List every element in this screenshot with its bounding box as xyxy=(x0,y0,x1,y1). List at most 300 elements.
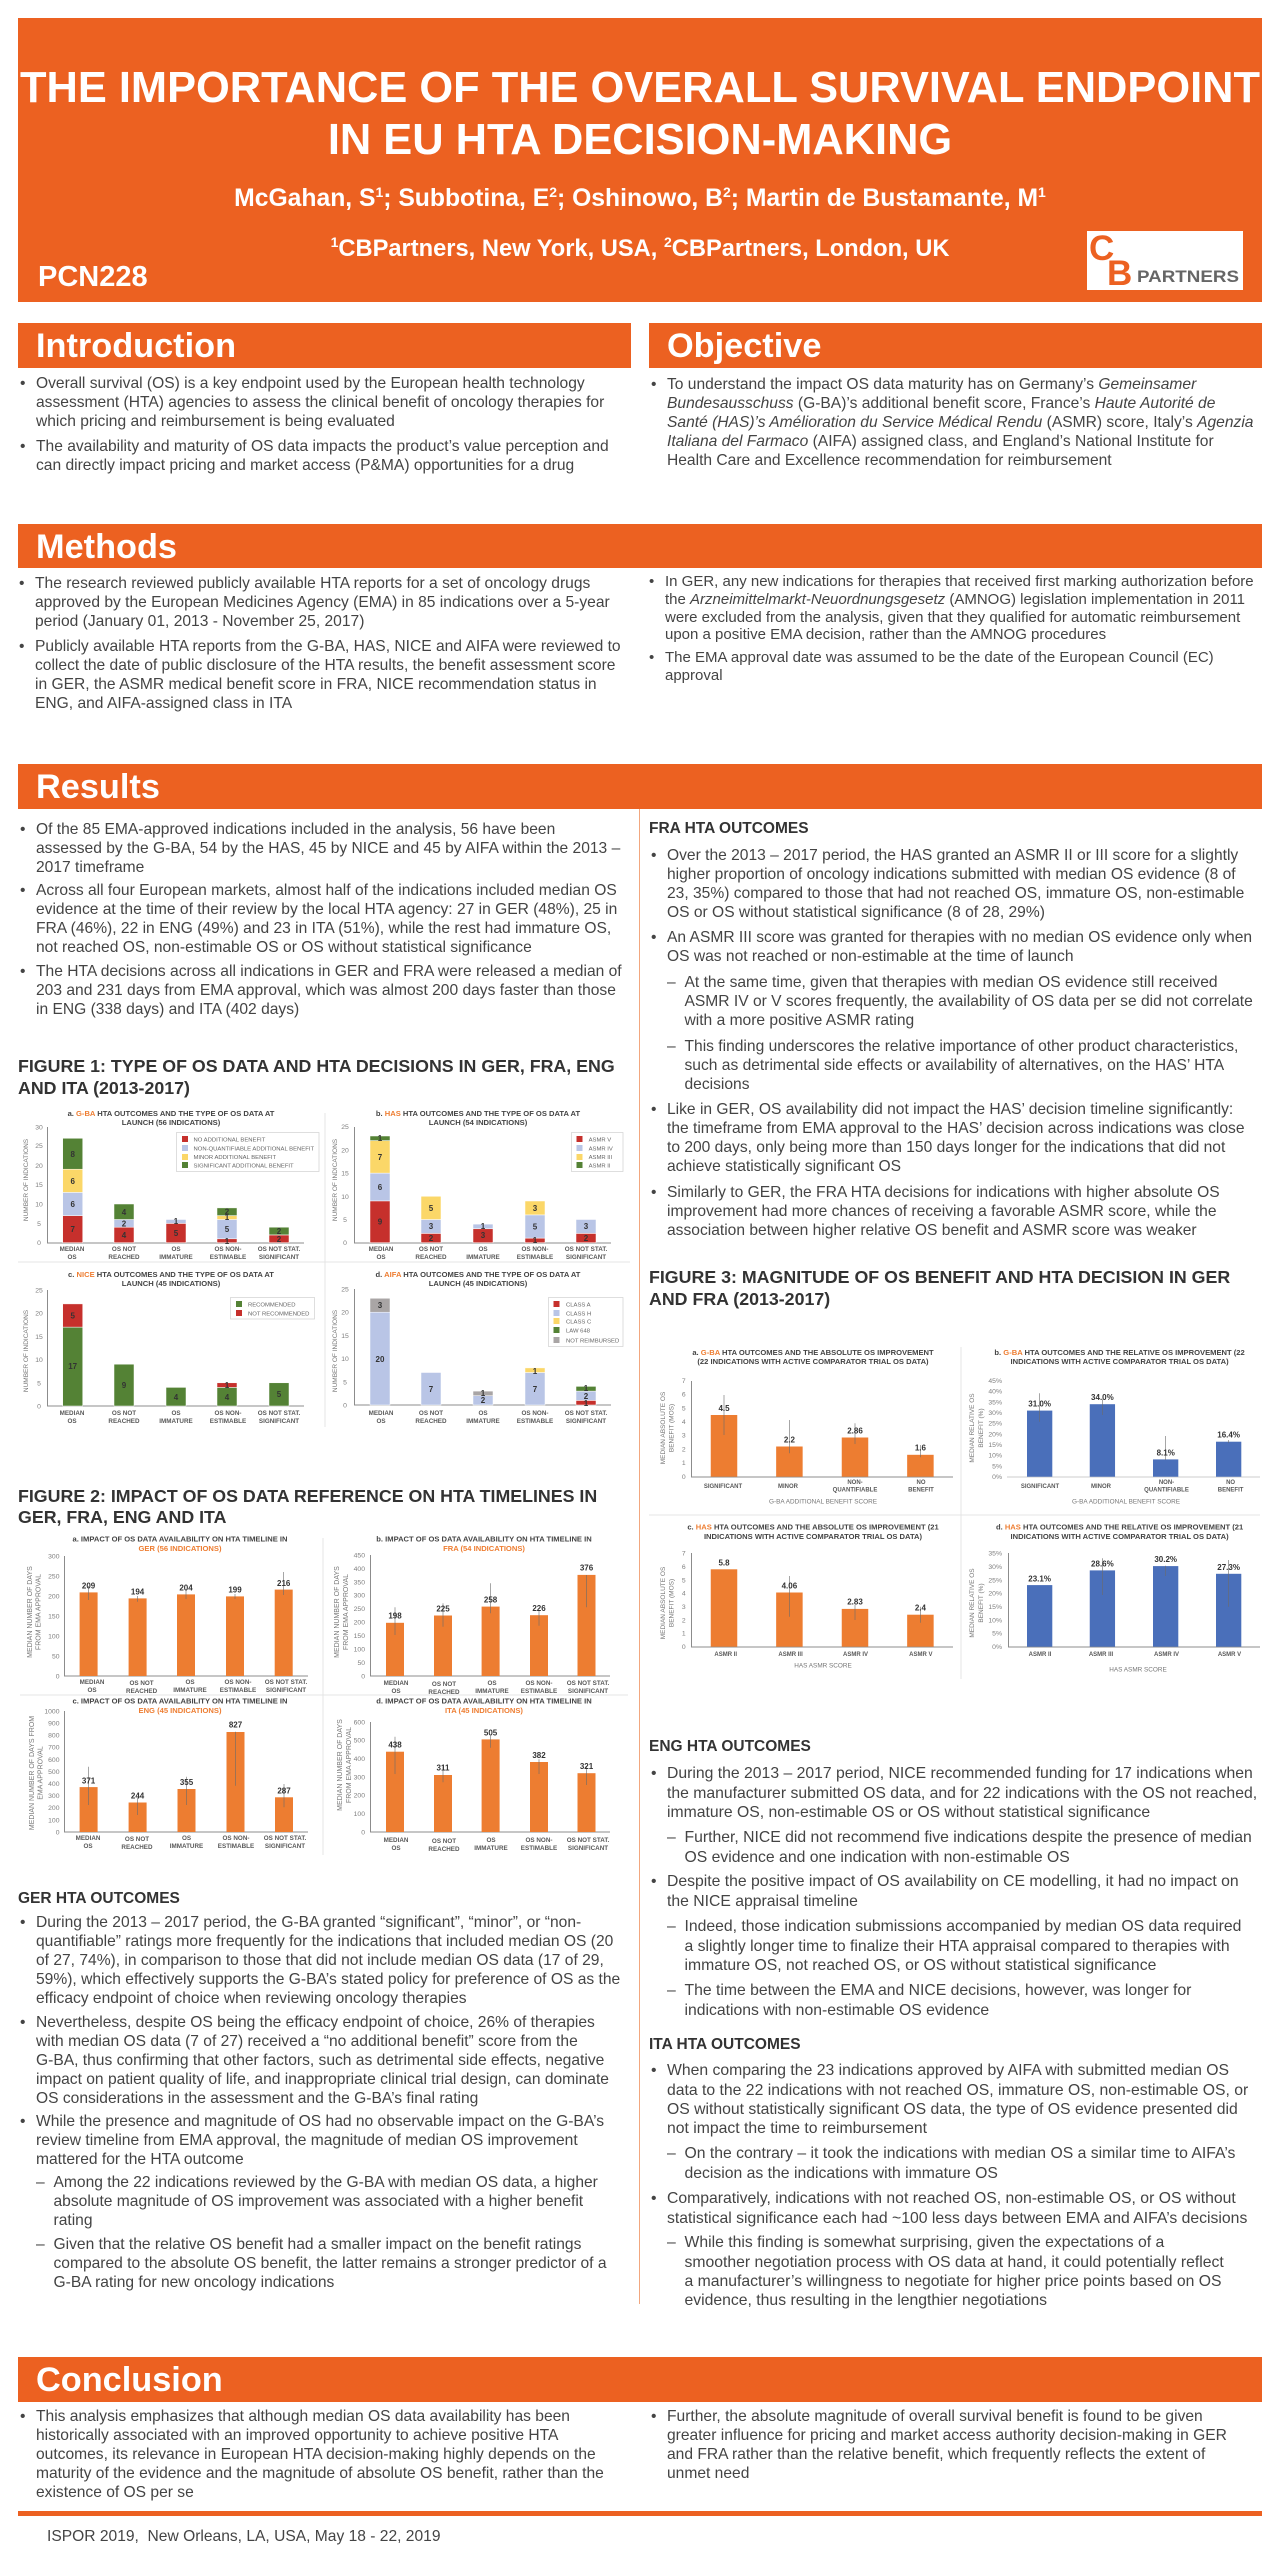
chart: d. ITA timeline bars: OS NOT STAT. xyxy=(567,1837,609,1844)
heading: ENG HTA outcomes: ENG HTA OUTCOMES xyxy=(649,1738,811,1755)
text block: ENG sub-bullet 3 xyxy=(684,1981,1191,2020)
chart: b. FRA timeline bars: b. IMPACT OF OS DATA AVAILABILITY ON HTA TIMELINE IN xyxy=(376,1534,592,1544)
chart: b. HAS stacked bars: OS xyxy=(478,1246,488,1253)
text block: GER bullet 2 xyxy=(36,2012,609,2108)
chart: a. G-BA stacked bars: 1 xyxy=(174,1217,179,1226)
chart: a. GER timeline bars: a. IMPACT OF OS DATA AVAILABILITY ON HTA TIMELINE IN xyxy=(72,1534,288,1544)
chart: c. NICE stacked bars: 4 xyxy=(174,1393,179,1402)
chart: d. HAS relative OS improvement: 5% xyxy=(992,1631,1002,1638)
chart: c. ENG timeline bars: MEDIAN xyxy=(76,1835,101,1842)
footer: conference note: ISPOR 2019, New Orleans, LA, USA, May 18 - 22, 2019 xyxy=(47,2528,440,2545)
text block: methods bullet 4 xyxy=(665,649,1214,685)
chart: b. HAS stacked bars: 5 xyxy=(533,1222,538,1232)
chart: a. GER timeline bars: OS xyxy=(185,1679,195,1686)
text block: FRA bullet 3: Like in GER, OS availability did not impact the HAS’ decision timeline significantly: xyxy=(667,1100,1233,1118)
chart: d. HAS relative OS improvement xyxy=(969,1522,1260,1673)
chart: b. HAS stacked bars: OS NON- xyxy=(522,1246,548,1253)
chart: b. G-BA relative OS improvement: 8.1% xyxy=(1157,1448,1175,1457)
text block: introduction bullet 1: assessment (HTA) agencies to assess the clinical benefit of oncology therapies for xyxy=(36,394,604,410)
chart: d. ITA timeline bars: FROM EMA APPROVAL xyxy=(346,1727,353,1803)
chart: a. GER timeline bars: OS NON- xyxy=(225,1679,251,1686)
chart: a. G-BA stacked bars: 4 xyxy=(122,1208,127,1217)
text block: results bullet 3: in ENG (338 days) and ITA (402 days) xyxy=(36,1000,299,1018)
chart: c. HAS absolute OS improvement: 5.8 xyxy=(718,1558,730,1567)
chart: a. G-BA absolute OS improvement: 2.2 xyxy=(784,1435,796,1444)
chart: d. HAS relative OS improvement: ASMR III xyxy=(1089,1652,1113,1658)
text block: introduction bullet 2: The availability and maturity of OS data impacts the product’s value perception and xyxy=(36,438,609,454)
text block: ITA sub-bullet 1: decision as the indications with immature OS xyxy=(684,2165,998,2182)
chart: a. G-BA stacked bars: 2 xyxy=(277,1227,282,1236)
poster code: PCN228 xyxy=(38,261,148,293)
chart: a. G-BA stacked bars: 5 xyxy=(225,1225,230,1234)
chart: d. ITA timeline bars: MEDIAN NUMBER OF DAYS xyxy=(337,1719,344,1811)
chart: b. HAS stacked bars: 0 xyxy=(343,1240,347,1247)
legend: G-BA: MINOR ADDITIONAL BENEFIT xyxy=(194,1155,276,1161)
chart: c. NICE stacked bars: NUMBER OF INDICATIONS xyxy=(23,1309,30,1392)
text block: GER bullet 1 xyxy=(36,1912,620,2008)
chart: b. FRA timeline bars: OS xyxy=(391,1688,401,1695)
chart: d. HAS relative OS improvement: 30.2% xyxy=(1154,1555,1177,1564)
text block: GER bullet 1: During the 2013 – 2017 period, the G-BA granted “significant”, “minor”, or “non- xyxy=(36,1914,581,1930)
chart: d. HAS relative OS improvement: MEDIAN RELATIVE OS xyxy=(969,1568,976,1638)
chart: c. ENG timeline bars: 0 xyxy=(56,1829,60,1836)
chart: a. G-BA stacked bars: 2 xyxy=(122,1220,127,1228)
icon: CBPartners logo xyxy=(1087,229,1243,293)
chart: d. ITA timeline bars: OS xyxy=(391,1845,401,1852)
chart: b. HAS stacked bars xyxy=(332,1109,623,1261)
chart: c. NICE stacked bars: OS NON- xyxy=(215,1410,241,1417)
text block: ENG bullet 1 xyxy=(667,1764,1257,1822)
text block: FRA bullet 3: achieve statistically significant OS xyxy=(667,1158,901,1174)
text block: ENG bullet 2: Despite the positive impact of OS availability on CE modelling, it had no impact on xyxy=(667,1873,1239,1890)
chart: c. ENG timeline bars: 900 xyxy=(48,1720,60,1728)
text block: conclusion bullet 2: greater influence for pricing and market access authority decision-making in GER xyxy=(667,2426,1227,2444)
text block: ITA bullet 2: Comparatively, indications with not reached OS, non-estimable OS, or OS without xyxy=(667,2190,1236,2207)
chart: a. G-BA stacked bars: a. G-BA HTA OUTCOMES AND THE TYPE OF OS DATA AT xyxy=(68,1109,275,1118)
chart: b. HAS stacked bars: 10 xyxy=(341,1194,349,1201)
text block: methods bullet 3 xyxy=(665,573,1254,644)
chart: c. ENG timeline bars: ESTIMABLE xyxy=(218,1843,254,1850)
chart: b. HAS stacked bars: b. HAS HTA OUTCOMES AND THE TYPE OF OS DATA AT xyxy=(376,1109,580,1118)
chart: c. ENG timeline bars: 800 xyxy=(48,1733,60,1740)
text block: results bullet 1 xyxy=(36,820,620,876)
chart: d. ITA timeline bars: 382 xyxy=(532,1751,546,1760)
text block: methods bullet 2: collect the date of public disclosure of the HTA results, the benefit assessment score xyxy=(35,656,615,674)
chart: c. HAS absolute OS improvement: INDICATIONS WITH ACTIVE COMPARATOR TRIAL OS DATA) xyxy=(704,1532,923,1541)
text block: GER bullet 2: G-BA, thus confirming that other factors, such as detrimental side effects, negative xyxy=(36,2052,604,2068)
chart: c. ENG timeline bars: 371 xyxy=(82,1776,96,1785)
text block: ENG bullet 1: During the 2013 – 2017 period, NICE recommended funding for 17 indications when xyxy=(667,1765,1253,1782)
text block: ITA sub-bullet 2: a manufacturer’s willingness to negotiate for higher price points based on OS xyxy=(684,2273,1221,2290)
chart: c. HAS absolute OS improvement: 6 xyxy=(682,1564,686,1571)
chart: d. ITA timeline bars: MEDIAN xyxy=(384,1837,409,1844)
chart: b. G-BA relative OS improvement: SIGNIFICANT xyxy=(1021,1484,1059,1490)
chart: b. G-BA relative OS improvement: 25% xyxy=(988,1421,1002,1428)
chart: b. FRA timeline bars: IMMATURE xyxy=(475,1688,509,1695)
text block: GER sub-bullet 2: Given that the relative OS benefit had a smaller impact on the benefit ratings xyxy=(54,2236,581,2252)
text block: conclusion bullet 1: outcomes, its relevance in European HTA decision-making highly depends on the xyxy=(36,2446,596,2462)
chart: b. FRA timeline bars: 0 xyxy=(361,1673,365,1680)
text block: GER sub-bullet 1: rating xyxy=(54,2212,93,2228)
chart: c. ENG timeline bars: REACHED xyxy=(121,1844,153,1851)
chart: a. GER timeline bars: REACHED xyxy=(126,1688,158,1695)
text block: methods bullet 3: the Arzneimittelmarkt-Neuordnungsgesetz (AMNOG) legislation implementation in 2011 xyxy=(665,591,1245,608)
text block: ITA bullet 1: OS without statistically significant OS data, the type of OS evidence presented did xyxy=(667,2101,1238,2118)
chart: a. G-BA stacked bars: OS xyxy=(67,1254,77,1261)
chart: c. NICE stacked bars: OS NOT STAT. xyxy=(258,1410,300,1417)
chart: a. GER timeline bars: MEDIAN NUMBER OF DAYS xyxy=(27,1566,34,1658)
chart: a. G-BA stacked bars: 30 xyxy=(35,1125,43,1132)
text block: FRA bullet 2: An ASMR III score was granted for therapies with no median OS evidence only when xyxy=(667,928,1252,946)
chart: d. ITA timeline bars: 0 xyxy=(361,1829,365,1836)
chart: d. HAS relative OS improvement: 0% xyxy=(992,1644,1002,1651)
chart: c. ENG timeline bars: 827 xyxy=(229,1721,243,1730)
text block: FRA bullet 4: improvement had more chances of receiving a favorable ASMR score, while the xyxy=(667,1202,1217,1220)
chart: c. HAS absolute OS improvement: 0 xyxy=(682,1644,686,1651)
legend: AIFA: CLASS A xyxy=(566,1302,591,1308)
text block: methods bullet 2 xyxy=(35,636,621,712)
chart: d. ITA timeline bars: 505 xyxy=(484,1728,498,1737)
chart: b. G-BA relative OS improvement: 20% xyxy=(988,1431,1002,1438)
text block: ITA sub-bullet 2: smoother negotiation process with OS data at hand, it could potentially reflect xyxy=(684,2254,1224,2271)
chart: a. G-BA absolute OS improvement: 1.6 xyxy=(915,1444,927,1453)
chart: a. G-BA absolute OS improvement: G-BA ADDITIONAL BENEFIT SCORE xyxy=(769,1498,877,1505)
chart: d. ITA timeline bars: 100 xyxy=(354,1811,365,1818)
chart: b. FRA timeline bars: 50 xyxy=(357,1660,365,1667)
chart: b. FRA timeline bars: OS NOT STAT. xyxy=(567,1680,609,1687)
chart: d. ITA timeline bars: 311 xyxy=(437,1764,450,1773)
chart: c. ENG timeline bars: 244 xyxy=(131,1792,145,1801)
chart: a. G-BA absolute OS improvement: MINOR xyxy=(778,1484,799,1490)
chart: a. GER timeline bars: MEDIAN xyxy=(80,1679,105,1686)
chart: d. AIFA stacked bars: 20 xyxy=(376,1355,385,1364)
heading: results: Results xyxy=(36,768,160,806)
chart: a. G-BA stacked bars: OS xyxy=(171,1246,181,1253)
text block: GER sub-bullet 2 xyxy=(54,2234,607,2292)
text block: methods bullet 2: ENG, and AIFA-assigned class in ITA xyxy=(35,694,292,712)
text block: ITA sub-bullet 2 xyxy=(684,2233,1224,2310)
chart: d. ITA timeline bars: 400 xyxy=(354,1756,365,1763)
panel: methods xyxy=(18,524,1262,712)
chart: d. ITA timeline bars: REACHED xyxy=(428,1846,460,1853)
chart: c. ENG timeline bars: 200 xyxy=(48,1805,60,1812)
panel: introduction xyxy=(18,323,631,474)
text block: results bullet 2: not reached OS, non-estimable OS or OS without statistical significance xyxy=(36,938,532,956)
heading: methods xyxy=(18,524,1262,568)
chart: a. GER timeline bars: 300 xyxy=(48,1553,60,1560)
text block: GER bullet 2: impact on patient quality of life, and inappropriate clinical trial design, can dominate xyxy=(36,2070,609,2088)
text block: ENG sub-bullet 2: a slightly longer time to finalize their HTA appraisal compared to therapies with xyxy=(684,1938,1230,1955)
heading: methods: Methods xyxy=(36,528,177,566)
chart: a. GER timeline bars: 199 xyxy=(228,1585,242,1594)
chart: b. HAS stacked bars: SIGNIFICANT xyxy=(566,1254,606,1261)
chart: b. HAS stacked bars: 5 xyxy=(343,1217,347,1224)
legend: NICE: RECOMMENDED xyxy=(248,1302,295,1308)
text block: ITA sub-bullet 2: evidence, thus resulting in the lengthier negotiations xyxy=(684,2292,1047,2309)
chart: c. ENG timeline bars: 400 xyxy=(48,1781,60,1788)
chart: d. ITA timeline bars: 438 xyxy=(388,1740,402,1749)
chart: a. GER timeline bars: 250 xyxy=(48,1573,60,1580)
chart: a. G-BA stacked bars: NUMBER OF INDICATIONS xyxy=(23,1138,30,1221)
chart: d. AIFA stacked bars: d. AIFA HTA OUTCOMES AND THE TYPE OF OS DATA AT xyxy=(376,1270,581,1279)
text block: FRA bullet 1: higher proportion of oncology indications submitted with median OS evidence (8 of xyxy=(667,866,1236,882)
affiliations: 1CBPartners, New York, USA, 2CBPartners, London, UK xyxy=(331,234,949,262)
text block: FRA sub-bullet 1: ASMR IV or V scores frequently, the availability of OS data per se did not correlate xyxy=(684,992,1253,1010)
chart: d. AIFA stacked bars: 2 xyxy=(481,1396,486,1405)
chart: d. HAS relative OS improvement: ASMR II xyxy=(1029,1652,1052,1658)
chart: b. G-BA relative OS improvement: 5% xyxy=(992,1463,1002,1470)
chart: a. G-BA stacked bars: OS NOT STAT. xyxy=(258,1246,300,1253)
chart: d. ITA timeline bars: OS xyxy=(486,1837,496,1844)
chart: c. NICE stacked bars: LAUNCH (45 INDICATIONS) xyxy=(122,1279,221,1288)
chart: b. G-BA relative OS improvement: MEDIAN RELATIVE OS xyxy=(969,1393,976,1463)
chart: c. ENG timeline bars: MEDIAN NUMBER OF DAYS FROM xyxy=(29,1716,36,1830)
text block: GER bullet 1: of 27, 74%), in comparison to those that did not include median OS data (17 of 29, xyxy=(36,1952,604,1968)
chart: b. FRA timeline bars: OS xyxy=(487,1680,497,1687)
chart: d. HAS relative OS improvement: ASMR IV xyxy=(1154,1652,1179,1658)
chart: b. HAS stacked bars: 3 xyxy=(429,1222,434,1231)
chart: c. NICE stacked bars xyxy=(23,1270,314,1425)
text block: FRA sub-bullet 2 xyxy=(684,1036,1238,1094)
chart: c. NICE stacked bars: 5 xyxy=(277,1390,282,1399)
chart: d. HAS relative OS improvement: 28.6% xyxy=(1091,1559,1114,1568)
chart: b. FRA timeline bars: 200 xyxy=(354,1620,365,1627)
text block: FRA bullet 4 xyxy=(667,1182,1220,1240)
text block: methods bullet 1 xyxy=(35,574,610,630)
text block: ENG sub-bullet 2: immature OS, not reached OS, or OS without statistical significance xyxy=(684,1957,1156,1974)
chart: a. G-BA stacked bars: IMMATURE xyxy=(159,1254,193,1261)
chart: a. G-BA stacked bars: 7 xyxy=(70,1225,75,1234)
chart: a. G-BA stacked bars: SIGNIFICANT xyxy=(259,1254,299,1261)
text block: ITA bullet 1: not impact the time to reimbursement xyxy=(667,2120,927,2137)
text block: FRA sub-bullet 1: with a more positive ASMR rating xyxy=(684,1012,914,1028)
text block: FRA bullet 1 xyxy=(667,846,1244,922)
chart: c. ENG timeline bars: 600 xyxy=(48,1757,60,1764)
chart: a. G-BA absolute OS improvement: a. G-BA HTA OUTCOMES AND THE ABSOLUTE OS IMPROVEMENT xyxy=(692,1348,934,1357)
chart: d. ITA timeline bars xyxy=(337,1696,610,1853)
chart: a. G-BA stacked bars: 6 xyxy=(70,1177,75,1186)
heading: objective: Objective xyxy=(667,327,821,365)
chart: c. ENG timeline bars: 287 xyxy=(277,1786,291,1795)
heading: figure 1 title: FIGURE 1: TYPE OF OS DATA AND HTA DECISIONS IN GER, FRA, ENG xyxy=(18,1056,615,1076)
chart: d. AIFA stacked bars: OS NON- xyxy=(522,1410,548,1417)
chart: a. G-BA absolute OS improvement: 5 xyxy=(682,1405,686,1412)
chart: a. G-BA stacked bars: OS NOT xyxy=(112,1246,136,1253)
text block: conclusion bullet 2: unmet need xyxy=(667,2464,749,2482)
chart: b. FRA timeline bars: REACHED xyxy=(428,1689,460,1696)
legend: HAS: ASMR IV xyxy=(589,1146,613,1152)
chart: c. NICE stacked bars: REACHED xyxy=(108,1418,140,1425)
chart: a. GER timeline bars: 50 xyxy=(52,1653,60,1660)
chart: d. AIFA stacked bars: 7 xyxy=(533,1385,538,1394)
legend: HAS: ASMR V xyxy=(589,1138,611,1144)
chart: d. HAS relative OS improvement: 25% xyxy=(988,1577,1002,1584)
text block: results bullet 2: Across all four European markets, almost half of the indications included median OS xyxy=(36,882,617,898)
heading: figure 2 title xyxy=(18,1486,597,1527)
text block: introduction bullet 2 xyxy=(36,436,609,474)
chart: d. AIFA stacked bars: 20 xyxy=(341,1310,349,1317)
text block: FRA bullet 2 xyxy=(667,928,1252,966)
chart: b. FRA timeline bars: 450 xyxy=(354,1552,365,1559)
chart: a. G-BA absolute OS improvement: 7 xyxy=(682,1378,686,1385)
chart: c. NICE stacked bars: 25 xyxy=(35,1288,43,1294)
text block: objective bullet: Health Care and Excellence recommendation for reimbursement xyxy=(667,452,1112,468)
legend: G-BA: NON-QUANTIFIABLE ADDITIONAL BENEFIT xyxy=(194,1146,314,1152)
heading: figure 3 title xyxy=(649,1267,1230,1309)
text block: ENG sub-bullet 1: OS evidence and one indication with non-estimable OS xyxy=(684,1849,1070,1866)
chart: b. G-BA relative OS improvement: 40% xyxy=(988,1389,1002,1396)
chart: b. G-BA relative OS improvement: 35% xyxy=(988,1399,1002,1406)
text block: FRA bullet 3: to 200 days, only being more than 150 days longer for the indications that did not xyxy=(667,1138,1225,1156)
chart: c. ENG timeline bars: OS xyxy=(182,1835,191,1842)
text block: methods bullet 1: approved by the European Medicines Agency (EMA) in 85 indications over a 5-year xyxy=(35,594,610,610)
heading: results xyxy=(18,764,1262,809)
text block: ITA sub-bullet 1 xyxy=(684,2144,1235,2183)
text block: conclusion bullet 2 xyxy=(667,2406,1227,2482)
legend: AIFA: CLASS H xyxy=(566,1312,591,1318)
chart: d. AIFA stacked bars: 1 xyxy=(481,1389,486,1398)
chart: a. G-BA stacked bars: 8 xyxy=(70,1150,75,1159)
chart: a. G-BA absolute OS improvement: 4.5 xyxy=(718,1404,730,1413)
chart: a. G-BA absolute OS improvement: 6 xyxy=(682,1392,686,1399)
chart: d. AIFA stacked bars: OS NOT STAT. xyxy=(565,1410,607,1417)
chart: d. HAS relative OS improvement: HAS ASMR SCORE xyxy=(1109,1666,1167,1673)
chart: b. HAS stacked bars: OS NOT xyxy=(419,1246,443,1253)
heading: figure 3 title: AND FRA (2013-2017) xyxy=(649,1289,830,1309)
chart: b. HAS stacked bars: 2 xyxy=(429,1234,434,1243)
chart: c. HAS absolute OS improvement: 3 xyxy=(682,1604,686,1611)
legend: HAS: ASMR III xyxy=(589,1155,613,1161)
chart: c. NICE stacked bars: 20 xyxy=(35,1311,43,1318)
chart: d. AIFA stacked bars: 0 xyxy=(343,1402,347,1410)
text block: ITA bullet 1: When comparing the 23 indications approved by AIFA with submitted median OS xyxy=(667,2062,1229,2079)
panel: poster header xyxy=(18,18,1262,302)
chart: a. G-BA stacked bars: 5 xyxy=(37,1221,41,1228)
chart: d. HAS relative OS improvement: 23.1% xyxy=(1028,1574,1051,1583)
chart: d. AIFA stacked bars: 10 xyxy=(341,1356,349,1363)
chart: a. G-BA stacked bars xyxy=(23,1109,319,1261)
chart: b. FRA timeline bars: 376 xyxy=(580,1563,594,1572)
heading: introduction xyxy=(18,323,631,368)
text block: conclusion bullet 1: maturity of the evidence and the magnitude of absolute OS benefit, rather than the xyxy=(36,2464,604,2482)
chart: a. G-BA stacked bars: 1 xyxy=(225,1213,230,1222)
legend: AIFA: LAW 648 xyxy=(566,1328,591,1334)
text block: conclusion bullet 1: This analysis emphasizes that although median OS data availability has been xyxy=(36,2408,570,2424)
chart: a. GER timeline bars: 0 xyxy=(56,1673,60,1680)
legend: G-BA: SIGNIFICANT ADDITIONAL BENEFIT xyxy=(194,1164,294,1170)
chart: a. G-BA absolute OS improvement: 3 xyxy=(682,1433,686,1440)
heading: objective xyxy=(649,323,1262,368)
chart: d. HAS relative OS improvement: 35% xyxy=(988,1551,1002,1558)
heading: ITA HTA outcomes: ITA HTA OUTCOMES xyxy=(649,2036,801,2053)
chart: b. FRA timeline bars: OS NOT xyxy=(432,1681,456,1688)
text block: objective bullet: Bundesausschuss (G-BA)’s additional benefit score, France’s Haute Autorité de xyxy=(667,394,1215,412)
heading: figure 3 title: FIGURE 3: MAGNITUDE OF OS BENEFIT AND HTA DECISION IN GER xyxy=(649,1267,1230,1287)
chart: a. GER timeline bars: 150 xyxy=(48,1613,60,1620)
text block: FRA bullet 1: Over the 2013 – 2017 period, the HAS granted an ASMR II or III score for a slightly xyxy=(667,846,1238,864)
chart: c. ENG timeline bars: IMMATURE xyxy=(170,1843,203,1850)
chart: d. ITA timeline bars: 500 xyxy=(354,1738,365,1745)
text block: GER bullet 3: While the presence and magnitude of OS had no observable impact on the G-BA’s xyxy=(36,2112,604,2130)
chart: a. G-BA absolute OS improvement: NO xyxy=(916,1480,926,1486)
chart: b. HAS stacked bars: MEDIAN xyxy=(369,1246,394,1253)
chart: c. NICE stacked bars: 0 xyxy=(37,1404,41,1410)
chart: b. FRA timeline bars: 226 xyxy=(532,1604,546,1613)
chart: b. HAS stacked bars: 7 xyxy=(378,1153,383,1162)
legend: NICE xyxy=(230,1298,314,1319)
chart: a. G-BA stacked bars: 0 xyxy=(37,1240,41,1247)
chart: a. GER timeline bars: OS NOT STAT. xyxy=(265,1679,307,1686)
text block: ENG bullet 1: the manufacturer submitted OS data, and for 22 indications with the OS not reached, xyxy=(667,1785,1257,1802)
chart: a. GER timeline bars: 200 xyxy=(48,1593,60,1600)
chart: c. ENG timeline bars: 100 xyxy=(48,1817,60,1824)
panel: results xyxy=(18,764,1262,2309)
chart: c. NICE stacked bars: 9 xyxy=(122,1381,127,1390)
text block: FRA sub-bullet 2: decisions xyxy=(684,1076,750,1092)
chart: d. HAS relative OS improvement: ASMR V xyxy=(1218,1652,1241,1658)
chart: b. FRA timeline bars: 350 xyxy=(354,1579,365,1586)
text block: GER bullet 1: efficacy endpoint of choice when reviewing oncology therapies xyxy=(36,1990,467,2006)
chart: b. HAS stacked bars: 15 xyxy=(341,1171,349,1178)
chart: d. AIFA stacked bars: OS xyxy=(376,1418,386,1425)
text block: conclusion bullet 1: historically associated with an improved opportunity to achieve positive HTA xyxy=(36,2426,558,2444)
figure 3 xyxy=(649,1267,1260,1679)
chart: c. HAS absolute OS improvement: 5 xyxy=(682,1577,686,1584)
chart: c. ENG timeline bars: OS NOT STAT. xyxy=(264,1835,306,1842)
chart: c. ENG timeline bars: EMA APPROVAL xyxy=(38,1746,44,1800)
chart: a. G-BA absolute OS improvement: MEDIAN ABSOLUTE OS xyxy=(660,1391,667,1464)
chart: a. G-BA absolute OS improvement: BENEFIT xyxy=(908,1488,934,1494)
chart: b. G-BA relative OS improvement: QUANTIFIABLE xyxy=(1144,1488,1189,1494)
text block: GER bullet 2: OS considerations in the assessment and the G-BA’s final rating xyxy=(36,2090,478,2106)
text block: ENG sub-bullet 2 xyxy=(684,1917,1241,1975)
legend: G-BA xyxy=(176,1132,319,1172)
chart: b. HAS stacked bars: 1 xyxy=(378,1134,383,1143)
chart: b. G-BA relative OS improvement: G-BA ADDITIONAL BENEFIT SCORE xyxy=(1072,1498,1180,1505)
chart: c. ENG timeline bars: 500 xyxy=(48,1769,60,1776)
chart: d. AIFA stacked bars: 5 xyxy=(343,1379,347,1386)
chart: c. NICE stacked bars: 1 xyxy=(225,1381,230,1390)
chart: c. HAS absolute OS improvement: c. HAS HTA OUTCOMES AND THE ABSOLUTE OS IMPROVEMENT (21 xyxy=(687,1522,939,1532)
text block: GER bullet 2: Nevertheless, despite OS being the efficacy endpoint of choice, 26% of therapies xyxy=(36,2014,595,2030)
chart: a. GER timeline bars: 204 xyxy=(179,1583,193,1592)
chart: b. HAS stacked bars: 20 xyxy=(341,1147,349,1154)
heading: conclusion: Conclusion xyxy=(36,2361,223,2399)
chart: b. HAS stacked bars: NUMBER OF INDICATIONS xyxy=(332,1138,339,1221)
chart: c. NICE stacked bars: 4 xyxy=(225,1393,230,1402)
text block: ENG bullet 1: immature OS, non-estimable OS or OS without statistical significance xyxy=(667,1804,1150,1821)
text block: ENG sub-bullet 2: Indeed, those indication submissions accompanied by median OS data required xyxy=(684,1918,1241,1935)
chart: c. HAS absolute OS improvement: ASMR IV xyxy=(843,1652,868,1658)
chart: c. HAS absolute OS improvement: ASMR V xyxy=(909,1652,932,1658)
chart: c. ENG timeline bars: SIGNIFICANT xyxy=(265,1843,305,1850)
chart: b. HAS stacked bars: IMMATURE xyxy=(466,1254,500,1261)
heading: figure 1 title xyxy=(18,1056,615,1098)
chart: d. AIFA stacked bars: SIGNIFICANT xyxy=(566,1418,606,1425)
chart: a. GER timeline bars: 100 xyxy=(48,1633,60,1640)
chart: d. AIFA stacked bars: MEDIAN xyxy=(369,1410,394,1417)
chart: b. HAS stacked bars: 1 xyxy=(481,1222,486,1231)
chart: b. FRA timeline bars: 198 xyxy=(388,1611,402,1620)
chart: b. G-BA relative OS improvement: BENEFIT (%) xyxy=(978,1408,985,1448)
chart: c. ENG timeline bars: OS xyxy=(83,1843,93,1850)
chart: a. G-BA stacked bars: REACHED xyxy=(108,1254,140,1261)
figure 1 xyxy=(18,1056,630,1427)
text block: methods bullet 1: period (January 01, 2013 - November 25, 2017) xyxy=(35,612,364,630)
chart: a. G-BA stacked bars: 6 xyxy=(70,1200,75,1209)
heading: GER HTA outcomes: GER HTA OUTCOMES xyxy=(18,1890,180,1907)
text block: introduction bullet 2: can directly impact pricing and market access (P&MA) opportunities for a drug xyxy=(36,456,574,474)
